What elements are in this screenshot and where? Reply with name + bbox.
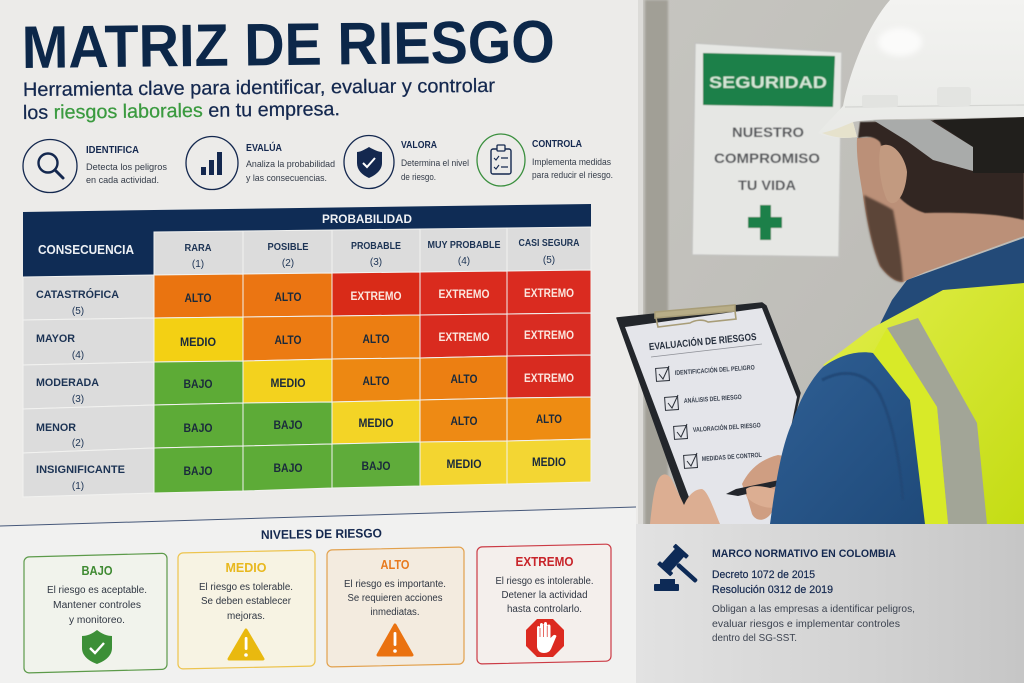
card: bajo: y monitoreo. (69, 615, 125, 626)
risk levels heading: NIVELES DE RIESGO (261, 526, 382, 542)
matrix cell labels: ALTO (274, 335, 302, 347)
title: MATRIZ DE RIESGO (21, 8, 555, 81)
icon: yellow warning triangle (229, 630, 263, 659)
subtitle: Herramienta clave para identificar, evaluar y controlar (23, 75, 496, 101)
step: evalua: EVALÚA (246, 141, 282, 154)
consequence labels: MODERADA (36, 377, 99, 389)
matrix cell labels: EXTREMO (350, 291, 402, 303)
consequence labels: (1) (72, 481, 84, 492)
card: alto (327, 547, 464, 667)
matrix cell labels: ALTO (362, 334, 390, 346)
probability labels: (5) (543, 255, 555, 266)
matrix cell labels: EXTREMO (524, 330, 574, 342)
matrix cell labels: BAJO (184, 466, 213, 478)
card: alto: inmediatas. (370, 607, 420, 618)
probability header (154, 204, 591, 232)
clipboard checklist (656, 362, 762, 468)
probability labels: (3) (370, 257, 382, 268)
legal description: Obligan a las empresas a identificar peligros, (712, 603, 915, 615)
subtitle (23, 75, 496, 124)
step: identifica: IDENTIFICA (86, 144, 139, 156)
probability labels: RARA (184, 242, 212, 254)
consequence labels: MAYOR (36, 333, 75, 345)
icon: orange warning triangle (378, 625, 412, 655)
card: medio (178, 550, 315, 669)
decree references (712, 569, 833, 596)
clipboard checklist: VALORACIÓN DEL RIESGO (693, 420, 761, 434)
consequence labels: (5) (72, 306, 84, 317)
matrix cell labels: MEDIO (358, 418, 394, 430)
left hand holding clipboard (650, 474, 720, 524)
panel: legal framework (635, 524, 1024, 683)
probability labels: (1) (192, 259, 204, 270)
card: medio: Se deben establecer (201, 596, 292, 607)
consequence labels: MENOR (36, 422, 76, 434)
card: medio: mejoras. (227, 611, 265, 622)
clipboard (617, 303, 800, 524)
matrix cell labels (180, 288, 574, 478)
card: alto: El riesgo es importante. (344, 579, 446, 590)
probability labels: PROBABLE (351, 240, 401, 252)
step: identifica: Detecta los peligros (86, 162, 167, 173)
probability labels (184, 237, 580, 270)
decree references: Resolución 0312 de 2019 (712, 584, 833, 596)
matrix cell labels: BAJO (184, 379, 213, 391)
ear (879, 145, 907, 203)
matrix cell labels: EXTREMO (524, 373, 574, 385)
card: bajo: El riesgo es aceptable. (47, 585, 147, 596)
photo wall (638, 0, 1024, 526)
consequence header: CONSECUENCIA (38, 243, 134, 257)
consequence labels: (3) (72, 394, 84, 405)
right hand fingers (742, 455, 784, 520)
icon: gavel (654, 544, 706, 592)
hard hat (818, 0, 1024, 138)
lower poster section (0, 507, 636, 683)
decree references: Decreto 1072 de 2015 (712, 569, 815, 581)
step: valora: VALORA (401, 139, 437, 151)
panel: left poster background (0, 0, 640, 683)
helmet strap (873, 117, 1024, 173)
process steps (23, 134, 613, 192)
photo: construction worker with clipboard (617, 0, 1024, 526)
matrix cell labels: BAJO (274, 463, 303, 475)
probability labels: (4) (458, 256, 470, 267)
step: evalua: y las consecuencias. (246, 173, 327, 184)
worker torso and vest (770, 238, 1024, 524)
pen (726, 479, 784, 496)
matrix cells (154, 270, 591, 493)
legal description: evaluar riesgos e implementar controles (712, 618, 900, 630)
card: extremo: Detener la actividad (502, 590, 588, 601)
step: valora (344, 136, 469, 188)
matrix cell labels: MEDIO (270, 378, 306, 390)
card: extremo: El riesgo es intolerable. (496, 576, 594, 587)
clipboard metal clip (655, 305, 736, 327)
matrix cell labels: MEDIO (532, 457, 566, 469)
step: valora: de riesgo. (401, 172, 436, 183)
right hand thumb (746, 486, 779, 508)
matrix cell labels: ALTO (450, 416, 478, 428)
step: controla: CONTROLA (532, 138, 582, 150)
step: identifica (23, 140, 167, 192)
step: valora: Determina el nivel (401, 158, 469, 169)
step: controla: Implementa medidas (532, 157, 611, 168)
card: alto: Se requieren acciones (348, 593, 442, 604)
card: bajo (24, 553, 167, 673)
consequence labels (36, 288, 125, 492)
probability labels: POSIBLE (268, 241, 308, 253)
clipboard heading: EVALUACIÓN DE RIESGOS (648, 330, 757, 353)
card: extremo (477, 544, 611, 664)
step: evalua: Analiza la probabilidad (246, 159, 335, 170)
clipboard checklist: ANÁLISIS DEL RIESGO (684, 392, 742, 405)
card: alto: ALTO (380, 557, 410, 572)
safety sign on wall: COMPROMISO (714, 150, 820, 166)
step: controla: para reducir el riesgo. (532, 170, 613, 181)
safety sign on wall (692, 43, 842, 257)
probability labels: CASI SEGURA (518, 237, 580, 249)
beard (864, 195, 903, 282)
subtitle: los riesgos laborales en tu empresa. (23, 98, 340, 124)
matrix cell labels: EXTREMO (438, 289, 490, 301)
consequence labels: (2) (72, 438, 84, 449)
probability labels: MUY PROBABLE (428, 239, 500, 251)
matrix cell labels: ALTO (184, 293, 212, 305)
matrix cell labels: BAJO (274, 420, 303, 432)
step: evalua (186, 136, 335, 190)
icon: stop hand (526, 619, 564, 657)
worker neck and face (857, 118, 1024, 282)
consequence header (23, 210, 154, 277)
matrix cell labels: ALTO (362, 376, 390, 388)
clipboard checklist: IDENTIFICACIÓN DEL PELIGRO (675, 362, 755, 377)
risk matrix (23, 204, 591, 497)
icon: green shield (82, 630, 112, 664)
consequence rows (23, 275, 154, 497)
legal description (712, 603, 915, 644)
matrix cell labels: EXTREMO (438, 332, 490, 344)
matrix cell labels: MEDIO (180, 337, 216, 349)
consequence labels: CATASTRÓFICA (36, 288, 119, 301)
card: extremo: hasta controlarlo. (507, 604, 582, 615)
probability columns (154, 227, 591, 275)
step: identifica: en cada actividad. (86, 175, 159, 186)
probability header: PROBABILIDAD (322, 212, 412, 226)
card: medio: El riesgo es tolerable. (199, 582, 293, 593)
legal description: dentro del SG-SST. (712, 632, 797, 644)
matrix cell labels: BAJO (362, 461, 391, 473)
consequence labels: INSIGNIFICANTE (36, 464, 125, 476)
safety sign on wall: SEGURIDAD (709, 73, 827, 92)
card: bajo: Mantener controles (53, 600, 141, 611)
matrix cell labels: ALTO (450, 374, 478, 386)
card: extremo: EXTREMO (516, 554, 574, 569)
hair (858, 118, 1024, 220)
card: medio: MEDIO (226, 560, 266, 575)
matrix cell labels: EXTREMO (524, 288, 574, 300)
matrix cell labels: ALTO (536, 414, 562, 426)
card: bajo: BAJO (82, 563, 112, 578)
matrix cell labels: MEDIO (446, 459, 482, 471)
safety sign on wall: TU VIDA (738, 177, 796, 193)
matrix cell labels: BAJO (184, 423, 213, 435)
safety sign on wall: NUESTRO (732, 124, 804, 140)
consequence labels: (4) (72, 350, 84, 361)
probability labels: (2) (282, 258, 294, 269)
step: controla (477, 134, 613, 186)
matrix cell labels: ALTO (274, 292, 302, 304)
clipboard checklist: MEDIDAS DE CONTROL (702, 452, 762, 463)
legal heading: MARCO NORMATIVO EN COLOMBIA (712, 548, 896, 560)
